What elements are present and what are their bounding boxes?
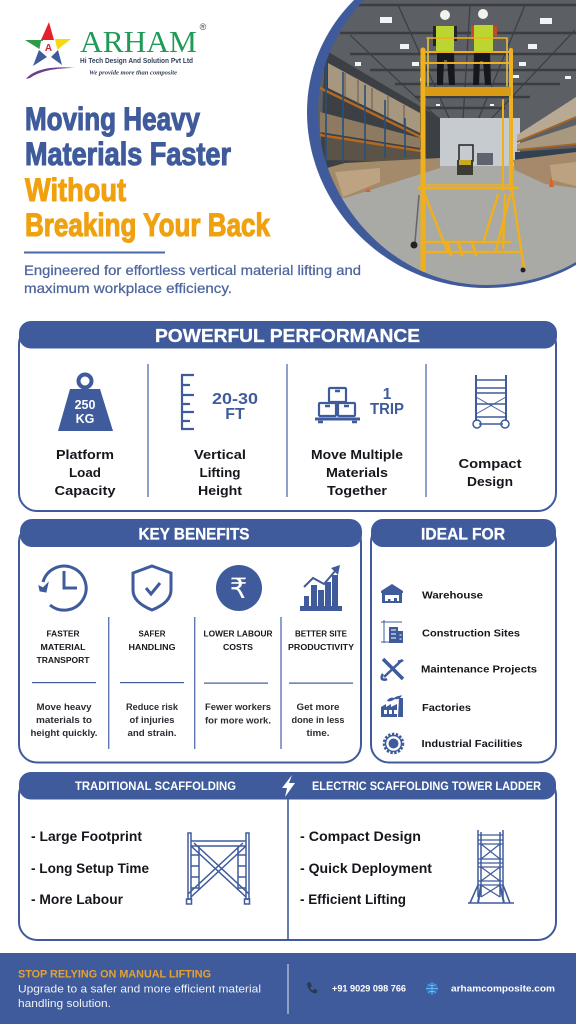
footer band	[0, 953, 576, 1024]
header: powerful performance	[19, 321, 557, 348]
icon: rupee circle: ₹	[230, 572, 247, 605]
title	[25, 101, 270, 243]
stat: vertical lifting label	[194, 447, 246, 498]
stat: 20-30 ft	[212, 391, 258, 423]
worker right	[471, 9, 497, 85]
benefit: better productivity: PRODUCTIVITY	[288, 642, 354, 652]
icon: ruler height	[181, 375, 194, 429]
benefit: faster transport: FASTER	[46, 628, 80, 638]
stat: move multiple label: Move Multiple	[311, 447, 403, 462]
list: electric scaffolding: - Quick Deployment	[300, 861, 433, 876]
callout: stop relying: STOP RELYING ON MANUAL LIFTING	[18, 968, 211, 980]
benefit: faster transport: Move heavy	[36, 702, 92, 713]
icon: warehouse	[381, 584, 403, 603]
stat: move multiple label: Materials	[326, 465, 388, 480]
icon: traditional scaffold frame	[186, 833, 250, 904]
benefit: safer handling	[120, 628, 184, 739]
list: traditional scaffolding: - Long Setup Time	[31, 861, 149, 876]
title rule	[24, 252, 165, 254]
header: ideal for: IDEAL FOR	[421, 526, 505, 544]
list: electric scaffolding: - Efficient Lifting	[300, 892, 406, 907]
worker left	[433, 10, 457, 85]
list: electric scaffolding: - Compact Design	[300, 829, 421, 844]
header: comparison titles: ELECTRIC SCAFFOLDING TOWER LADDER	[312, 781, 542, 793]
contact: website: arhamcomposite.com	[451, 984, 555, 994]
stat: 1 trip	[370, 386, 404, 418]
list: electric scaffolding	[300, 829, 433, 907]
panel: ideal for	[371, 519, 556, 762]
stat: 1 trip: TRIP	[370, 401, 404, 418]
icon: globe	[426, 982, 438, 994]
logo: ®	[200, 22, 207, 32]
label: maintenance projects: Maintenance Projects	[421, 664, 537, 676]
header: comparison titles	[19, 772, 556, 800]
benefit: lower labour costs: LOWER LABOUR	[204, 628, 273, 638]
benefit: better productivity: done in less	[292, 715, 344, 726]
stat: load capacity label: Capacity	[54, 483, 116, 498]
icon: construction site	[381, 620, 403, 643]
benefit: faster transport	[30, 628, 98, 739]
stat: compact design label: Design	[467, 474, 513, 489]
benefit: safer handling: Reduce risk	[126, 702, 179, 713]
icon: wrench and screwdriver	[382, 659, 403, 680]
logo: A	[45, 43, 52, 54]
callout: stop relying	[18, 968, 261, 1010]
subtitle: Engineered for effortless vertical material lifting and	[24, 262, 361, 278]
hero photo: scaffold tower in warehouse	[300, 0, 576, 290]
benefit: lower labour costs: for more work.	[205, 716, 271, 726]
icon: shield check	[133, 566, 171, 610]
icon: electric tower ladder	[468, 830, 514, 903]
label: construction sites: Construction Sites	[422, 628, 520, 640]
stat: 1 trip: 1	[383, 386, 392, 403]
icon: weight 250 kg	[58, 374, 113, 431]
title: Moving Heavy	[25, 101, 200, 137]
stat: compact design label: Compact	[458, 456, 522, 471]
icon: factory	[381, 695, 403, 717]
stat: move multiple label	[311, 447, 403, 498]
benefit: lower labour costs: COSTS	[223, 642, 253, 652]
benefit: faster transport: MATERIAL	[40, 642, 86, 652]
icon: phone	[307, 982, 318, 994]
benefit: faster transport: TRANSPORT	[36, 655, 90, 665]
benefit: safer handling: and strain.	[128, 728, 176, 739]
benefit: faster transport: height quickly.	[30, 728, 98, 739]
label: warehouse: Warehouse	[422, 590, 483, 602]
header: ideal for	[371, 519, 556, 547]
benefit: faster transport: materials to	[36, 715, 92, 726]
panel: key benefits	[19, 519, 362, 762]
stat: move multiple label: Together	[327, 483, 387, 498]
icon: gear industry	[384, 734, 403, 753]
title: Materials Faster	[25, 136, 231, 172]
benefit: better productivity: BETTER SITE	[295, 628, 347, 638]
header: comparison titles: TRADITIONAL SCAFFOLDING	[75, 781, 236, 793]
label: factories: Factories	[422, 703, 471, 714]
panel: scaffolding comparison	[19, 772, 556, 941]
title: Without	[25, 172, 126, 208]
benefit: better productivity: Get more	[296, 702, 340, 713]
logo: Hi Tech Design And Solution Pvt Ltd	[80, 56, 193, 65]
stat: 20-30 ft: 20-30	[212, 391, 258, 408]
icon: lightning bolt	[282, 775, 295, 797]
logo: We provide more than composite	[89, 70, 177, 76]
stat: vertical lifting label: Height	[198, 483, 243, 498]
benefit: lower labour costs	[204, 628, 273, 726]
stat: vertical lifting label: Lifting	[200, 465, 241, 480]
header: key benefits	[20, 519, 362, 547]
icon: clock	[39, 566, 86, 610]
contact: phone number: +91 9029 098 766	[332, 984, 406, 994]
subtitle	[24, 262, 361, 296]
stat: load capacity label	[54, 447, 116, 498]
icon: compact scaffold on wheels	[473, 375, 509, 428]
panel: powerful performance	[19, 321, 557, 511]
list: traditional scaffolding: - More Labour	[31, 892, 124, 907]
icon: weight 250 kg: KG	[76, 412, 94, 426]
header: powerful performance: POWERFUL PERFORMANCE	[155, 326, 420, 346]
benefit: lower labour costs: Fewer workers	[205, 702, 271, 713]
benefit: safer handling: of injuries	[130, 715, 174, 726]
stat: load capacity label: Platform	[56, 447, 114, 462]
stat: vertical lifting label: Vertical	[194, 447, 246, 462]
benefit: better productivity: time.	[306, 728, 330, 739]
logo	[25, 22, 207, 79]
icon: weight 250 kg: 250	[75, 398, 95, 412]
benefit: safer handling: SAFER	[138, 628, 166, 638]
subtitle: maximum workplace efficiency.	[24, 280, 232, 296]
icon: stacked boxes on pallet	[315, 388, 360, 422]
title: Breaking Your Back	[25, 207, 270, 243]
benefit: better productivity	[288, 628, 354, 739]
callout: stop relying: Upgrade to a safer and more efficient material	[18, 984, 261, 996]
label: industrial facilities: Industrial Facilities	[422, 739, 523, 750]
stat: load capacity label: Load	[69, 465, 101, 480]
stat: compact design label	[458, 456, 522, 489]
stat: 20-30 ft: FT	[225, 406, 245, 423]
benefit: safer handling: HANDLING	[128, 642, 176, 652]
list: traditional scaffolding	[31, 829, 149, 907]
icon: rupee circle	[216, 565, 262, 611]
list: traditional scaffolding: - Large Footprint	[31, 829, 143, 844]
header: key benefits: KEY BENEFITS	[138, 526, 250, 544]
icon: growth bar chart	[300, 565, 342, 611]
logo: ARHAM	[80, 24, 197, 59]
callout: stop relying: handling solution.	[18, 998, 111, 1010]
